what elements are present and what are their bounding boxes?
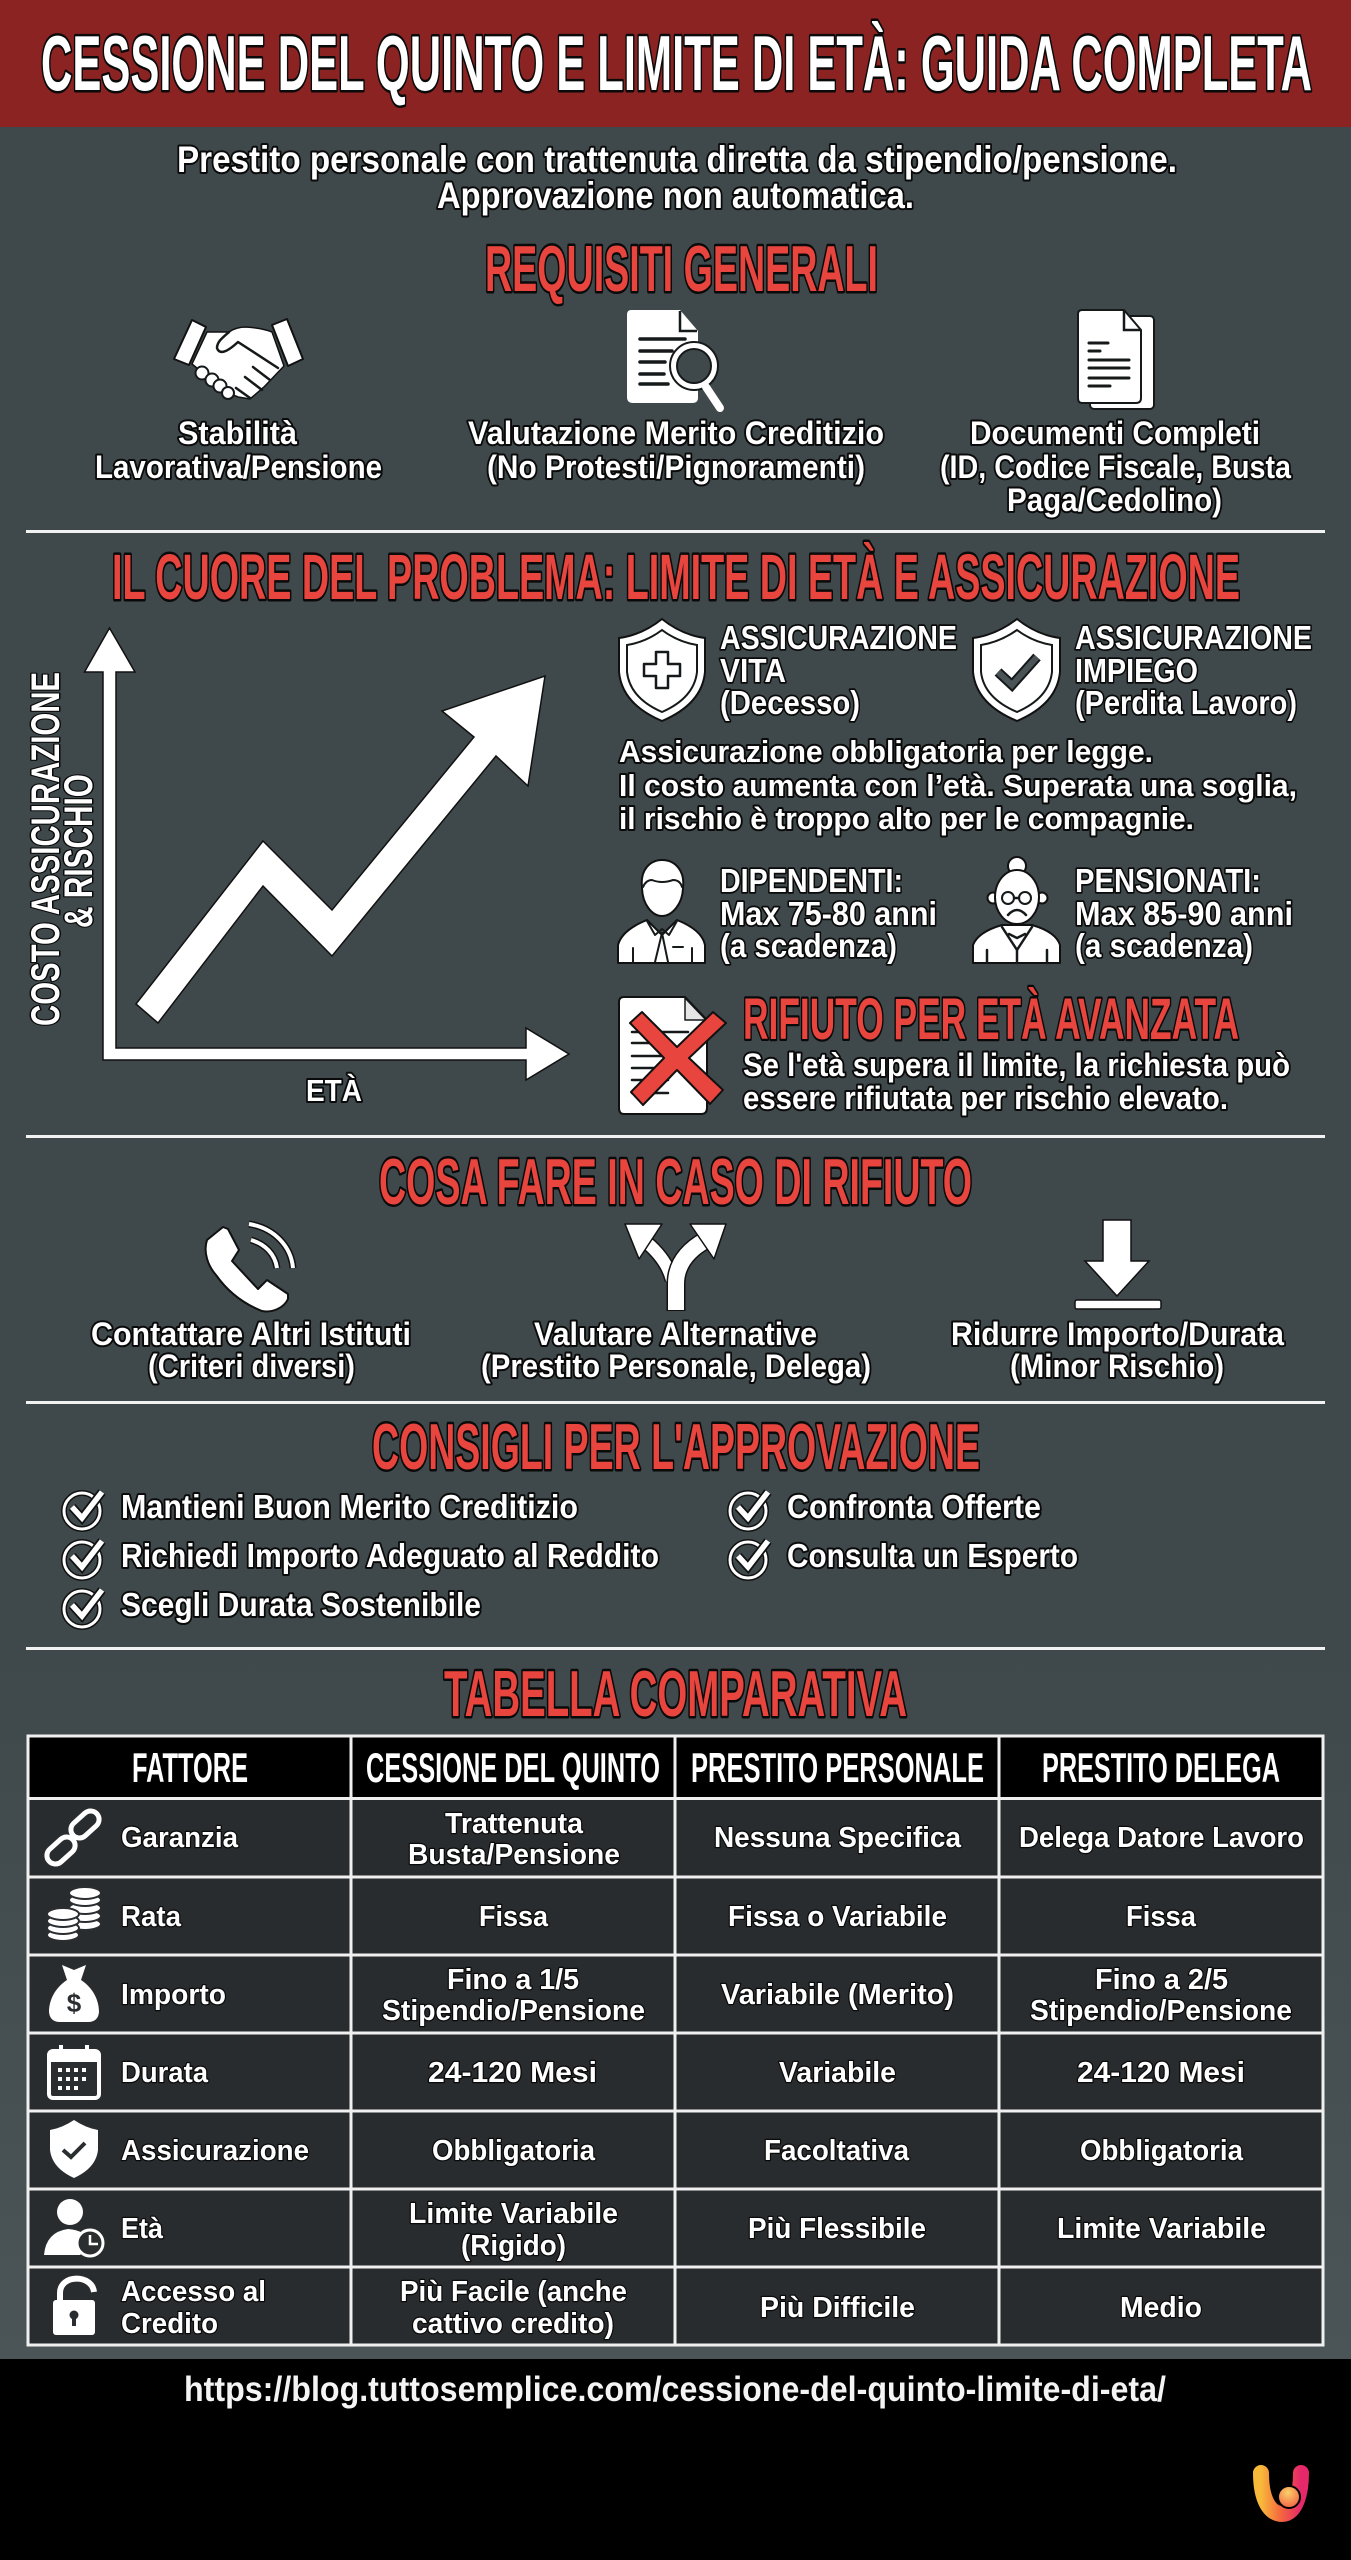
intro text: Prestito personale con trattenuta diretta da stipendio/pensione. (177, 139, 1177, 180)
label: documenti completi: (ID, Codice Fiscale, Busta (940, 449, 1291, 485)
label: stabilità: Lavorativa/Pensione (95, 449, 382, 485)
icon: reduce arrow (1075, 1220, 1161, 1309)
row: garanzia: Garanzia (121, 1822, 239, 1854)
row: durata: 24-120 Mesi (428, 2057, 597, 2089)
row: garanzia: Nessuna Specifica (714, 1822, 962, 1854)
text: pensionati (1075, 862, 1293, 964)
label: valutazione merito creditizio (468, 415, 884, 485)
label: ridurre importo/durata: (Minor Rischio) (1010, 1348, 1224, 1384)
row: accesso al credito (53, 2276, 1202, 2340)
text: assicurazione impiego (1075, 619, 1312, 721)
text: dipendenti: Max 75-80 anni (720, 895, 937, 932)
text: assicurazione impiego: ASSICURAZIONE (1075, 619, 1312, 656)
row: rata: Fissa (479, 1901, 549, 1933)
row: accesso al credito: Medio (1120, 2292, 1202, 2324)
icon: rejected document (619, 997, 726, 1114)
footer (0, 2359, 1351, 2560)
label: valutazione merito creditizio: (No Protesti/Pignoramenti) (487, 449, 865, 485)
row: importo: Fino a 2/5 (1095, 1964, 1228, 1996)
heading: requisiti generali: REQUISITI GENERALI (485, 232, 878, 305)
label: contattare altri istituti: Contattare Altri Istituti (91, 1316, 411, 1352)
text: pensionati: PENSIONATI: (1075, 862, 1261, 899)
source url: https://blog.tuttosemplice.com/cessione-del-quinto-limite-di-eta/ (184, 2370, 1166, 2409)
label: contattare altri istituti: (Criteri diversi) (148, 1348, 355, 1384)
logo (1261, 2473, 1301, 2514)
row: età: Più Flessibile (748, 2213, 926, 2245)
row: importo: Stipendio/Pensione (382, 1995, 645, 2027)
row: età (44, 2198, 1266, 2262)
icon: life insurance shield (619, 619, 705, 721)
rising arrow (136, 676, 545, 1023)
label: ridurre importo/durata (951, 1316, 1284, 1384)
header banner (0, 0, 1351, 127)
table header row (132, 1744, 1280, 1791)
chart: cost rising with age (24, 628, 569, 1108)
text: assicurazione impiego: IMPIEGO (1075, 652, 1198, 689)
row: durata: Durata (121, 2057, 209, 2089)
row: assicurazione: Assicurazione (121, 2135, 309, 2167)
icon: shield with check (50, 2120, 98, 2178)
tip: confronta offerte (730, 1488, 1041, 1529)
tip: scegli durata sostenibile: Scegli Durata Sostenibile (121, 1586, 481, 1623)
text: assicurazione impiego: (Perdita Lavoro) (1075, 684, 1297, 721)
text: rifiuto per età avanzata: essere rifiutata per rischio elevato. (743, 1080, 1228, 1116)
intro text (177, 139, 1177, 216)
row: importo: Importo (121, 1979, 226, 2011)
comparison table (27, 1736, 1323, 2346)
row: importo: Fino a 1/5 (447, 1964, 579, 1996)
icon: employment insurance shield (973, 619, 1060, 721)
icon: employee (618, 860, 705, 963)
label: valutare alternative: Valutare Alternative (534, 1316, 817, 1352)
row: età: Età (121, 2213, 164, 2245)
row: assicurazione: Facoltativa (764, 2135, 910, 2167)
panel: requisiti generali (95, 232, 1291, 518)
icon: fork arrows (625, 1224, 726, 1311)
row: durata: 24-120 Mesi (1077, 2057, 1245, 2089)
row: garanzia: Trattenuta (445, 1808, 584, 1840)
row: accesso al credito: Accesso al (121, 2276, 266, 2308)
intro text: Approvazione non automatica. (437, 175, 914, 216)
row: accesso al credito: Credito (121, 2308, 218, 2340)
row: età: Limite Variabile (1057, 2213, 1266, 2245)
panel: tabella comparativa (27, 1657, 1323, 2346)
label: documenti completi (940, 415, 1291, 518)
label: ridurre importo/durata: Ridurre Importo/Durata (951, 1316, 1284, 1352)
y axis label (24, 672, 101, 1026)
tip: mantieni buon merito creditizio: Mantieni Buon Merito Creditizio (121, 1488, 578, 1525)
y axis label: & RISCHIO (57, 774, 101, 928)
table header row: PRESTITO PERSONALE (691, 1744, 984, 1791)
text: assicurazione vita: (Decesso) (720, 684, 860, 721)
label: stabilità (95, 415, 382, 485)
row: accesso al credito: cattivo credito) (412, 2308, 614, 2340)
table header row: CESSIONE DEL QUINTO (366, 1744, 660, 1791)
row: assicurazione (50, 2120, 1244, 2178)
panel: cosa fare in caso di rifiuto (91, 1145, 1284, 1384)
row: rata: Rata (121, 1901, 182, 1933)
label: documenti completi: Paga/Cedolino) (1007, 482, 1222, 518)
heading: tabella comparativa: TABELLA COMPARATIVA (444, 1657, 907, 1730)
row: garanzia: Delega Datore Lavoro (1019, 1822, 1304, 1854)
icon: calendar (49, 2045, 99, 2098)
icon: pensioner (973, 857, 1060, 963)
row: rata: Fissa o Variabile (728, 1901, 947, 1933)
icon: coins (47, 1887, 101, 1941)
icon: person with clock (44, 2199, 103, 2256)
row: rata: Fissa (1126, 1901, 1197, 1933)
panel: il cuore del problema (24, 541, 1312, 1116)
y axis arrow (84, 628, 569, 1080)
row: rata (47, 1887, 1197, 1941)
text: assicurazione vita (720, 619, 957, 721)
text: rifiuto per età avanzata (743, 987, 1290, 1116)
row: importo: Variabile (Merito) (721, 1979, 954, 2011)
text: dipendenti: (a scadenza) (720, 927, 897, 964)
icon: document with magnifier (627, 310, 720, 408)
x axis label: ETÀ (306, 1073, 362, 1108)
icon: open padlock (53, 2279, 95, 2335)
icon: documents (1078, 310, 1154, 409)
row: accesso al credito: Più Facile (anche (400, 2276, 627, 2308)
text: obligatory insurance explanation: Assicurazione obbligatoria per legge. (619, 734, 1153, 769)
table header row: FATTORE (132, 1744, 248, 1791)
text: obligatory insurance explanation: il rischio è troppo alto per le compagnie. (619, 801, 1194, 836)
label: stabilità: Stabilità (178, 415, 297, 451)
row: garanzia (43, 1807, 1304, 1871)
label: contattare altri istituti (91, 1316, 411, 1384)
text: pensionati: (a scadenza) (1075, 927, 1253, 964)
icon: handshake (174, 319, 303, 399)
row: assicurazione: Obbligatoria (1080, 2135, 1244, 2167)
row: durata: Variabile (779, 2057, 896, 2089)
text: obligatory insurance explanation (619, 734, 1297, 836)
icon: phone (206, 1224, 293, 1311)
row: assicurazione: Obbligatoria (432, 2135, 596, 2167)
y axis label: COSTO ASSICURAZIONE (24, 672, 68, 1026)
icon: chain link (43, 1807, 103, 1868)
tip: consulta un esperto (730, 1537, 1078, 1578)
label: documenti completi: Documenti Completi (970, 415, 1260, 451)
text: assicurazione vita: VITA (720, 652, 786, 689)
tip: confronta offerte: Confronta Offerte (787, 1488, 1041, 1525)
text: pensionati: Max 85-90 anni (1075, 895, 1293, 932)
tip: consulta un esperto: Consulta un Esperto (787, 1537, 1078, 1574)
text: assicurazione vita: ASSICURAZIONE (720, 619, 957, 656)
row: importo: Stipendio/Pensione (1030, 1995, 1292, 2027)
row: età: Limite Variabile (409, 2198, 618, 2230)
row: garanzia: Busta/Pensione (408, 1839, 620, 1871)
text: dipendenti: DIPENDENTI: (720, 862, 903, 899)
label: valutare alternative: (Prestito Personale, Delega) (481, 1348, 871, 1384)
text: rifiuto per età avanzata: Se l'età supera il limite, la richiesta può (743, 1047, 1290, 1083)
label: valutazione merito creditizio: Valutazione Merito Creditizio (468, 415, 884, 451)
row: durata (49, 2045, 1245, 2098)
label: valutare alternative (481, 1316, 871, 1384)
text: obligatory insurance explanation: Il costo aumenta con l’età. Superata una soglia, (619, 768, 1297, 803)
icon: money bag: $ (67, 1988, 82, 2018)
panel: consigli per l'approvazione (64, 1410, 1078, 1627)
tip: richiedi importo adeguato: Richiedi Importo Adeguato al Reddito (121, 1537, 659, 1574)
row: accesso al credito: Più Difficile (760, 2292, 915, 2324)
row: importo (49, 1964, 1292, 2027)
text: dipendenti (720, 862, 937, 964)
icon: money bag (49, 1965, 99, 2022)
row: età: (Rigido) (461, 2230, 566, 2262)
